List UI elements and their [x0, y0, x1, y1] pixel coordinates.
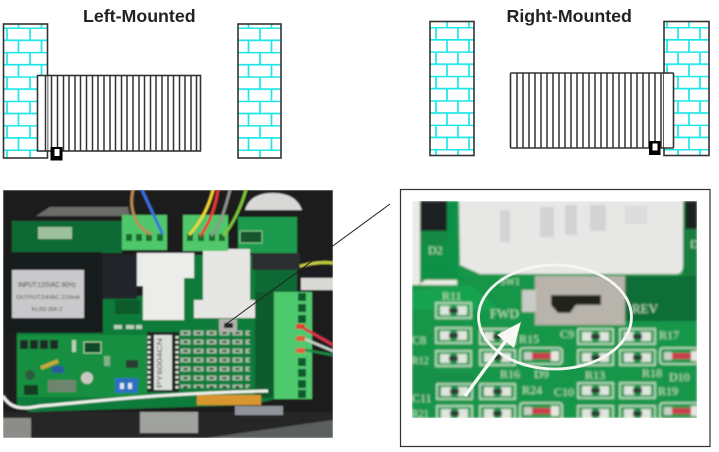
transformer: INPUT:120VAC 60Hz — [18, 282, 76, 289]
left brick pillar — [4, 24, 48, 158]
silkscreen labels: R21 — [412, 409, 429, 420]
slide switch — [522, 276, 625, 325]
small connector — [240, 231, 262, 243]
silkscreen labels: D10 — [669, 370, 690, 384]
transformer — [3, 252, 101, 333]
microcontroller chip: PY6004CN — [155, 338, 164, 388]
silkscreen labels: REV — [632, 301, 659, 316]
dome behind board — [245, 193, 302, 210]
lower-left components — [20, 325, 142, 395]
silkscreen labels: R11 — [442, 289, 462, 303]
pads — [436, 303, 471, 318]
silkscreen labels: R16 — [500, 367, 520, 381]
white relay right — [194, 249, 255, 318]
microcontroller chip — [147, 332, 179, 392]
smd components area — [180, 330, 250, 388]
wires right — [296, 262, 333, 355]
silkscreen labels: R19 — [658, 384, 678, 398]
callout panel: switch close-up — [400, 190, 710, 446]
silkscreen labels: D2 — [428, 243, 443, 257]
white relay left — [137, 253, 194, 320]
silkscreen labels: C9 — [560, 327, 574, 341]
motor icon — [50, 147, 62, 160]
silkscreen labels: D9 — [534, 367, 549, 381]
transformer: KL/50-306-2 — [32, 307, 62, 313]
sliding gate — [38, 75, 200, 151]
wires top — [132, 190, 246, 235]
silkscreen labels: R18 — [642, 366, 662, 380]
silkscreen labels: D — [690, 237, 699, 251]
terminal block top-left — [122, 215, 167, 250]
switch on board — [219, 319, 237, 332]
black relay — [103, 255, 137, 299]
close-up photo — [412, 201, 702, 421]
white arrow — [465, 322, 521, 396]
silkscreen labels: C11 — [412, 391, 432, 405]
silkscreen labels: R17 — [659, 328, 679, 342]
silkscreen labels: C8 — [412, 333, 426, 347]
heading: Left-Mounted: Left-Mounted — [83, 6, 196, 26]
silkscreen labels: R12 — [412, 356, 429, 367]
diagram: left-mounted gate — [4, 24, 281, 160]
silkscreen labels: FWD — [490, 306, 519, 321]
leader line — [225, 204, 390, 325]
circuit board — [12, 221, 122, 253]
silkscreen labels: R13 — [585, 368, 605, 382]
silkscreen labels — [412, 237, 699, 420]
diagram: right-mounted gate — [430, 22, 709, 156]
silkscreen labels: C10 — [554, 385, 574, 399]
photo: control board — [3, 190, 333, 438]
heading: Right-Mounted: Right-Mounted — [506, 6, 632, 26]
left brick pillar — [430, 22, 474, 156]
silkscreen labels: R15 — [519, 332, 539, 346]
motor icon — [649, 141, 660, 155]
highlight ellipse — [478, 265, 632, 369]
right brick pillar — [238, 24, 281, 158]
white cable — [3, 391, 268, 408]
right brick pillar — [664, 22, 709, 156]
silkscreen labels: SW1 — [500, 277, 520, 288]
terminal block top-middle — [183, 215, 228, 251]
orange tape — [197, 395, 261, 405]
silkscreen labels: R24 — [522, 383, 542, 397]
white relay — [459, 201, 683, 274]
sliding gate — [510, 73, 674, 148]
transformer: OUTPUT:24VAC 210mA — [16, 295, 80, 301]
terminal block right — [274, 292, 312, 399]
